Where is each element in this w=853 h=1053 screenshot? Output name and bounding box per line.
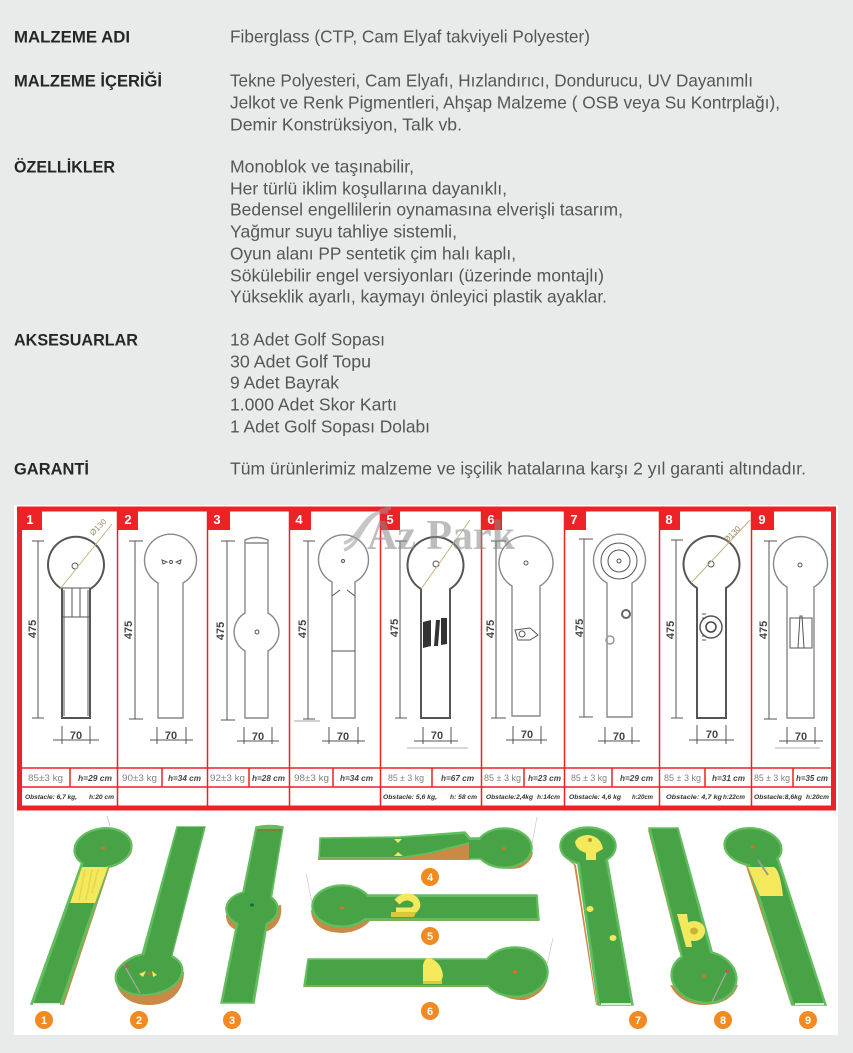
weights and heights: h=29 cm xyxy=(78,773,112,783)
course 2 xyxy=(112,827,205,1005)
weights and heights: h=28 cm xyxy=(252,773,285,783)
obstacle data: h: 58 cm xyxy=(450,794,477,801)
obstacle data: h:20cm xyxy=(806,794,829,801)
weights and heights: 90±3 kg xyxy=(122,773,157,784)
section: aksesuarlar: 30 Adet Golf Topu xyxy=(230,352,371,372)
drawing numbers: 2 xyxy=(124,512,132,527)
obstacle data: Obstacle: 6,7 kg, xyxy=(25,794,77,801)
course number badges: 9 xyxy=(805,1015,811,1027)
course number badges: 7 xyxy=(635,1015,641,1027)
obstacle data: h:20 cm xyxy=(89,794,114,801)
weights and heights: 85 ± 3 kg xyxy=(571,773,607,784)
weights and heights: h=29 cm xyxy=(620,773,653,783)
obstacle data: h:14cm xyxy=(537,794,560,801)
weights and heights: 92±3 kg xyxy=(210,773,245,784)
section: malzeme icerigi: Jelkot ve Renk Pigmentleri, Ahşap Malzeme ( OSB veya Su Kontrplağı), xyxy=(230,93,780,113)
course 4 xyxy=(318,817,537,869)
course number badges: 8 xyxy=(720,1015,726,1027)
section: ozellikler: Yükseklik ayarlı, kaymayı önleyici plastik ayaklar. xyxy=(230,287,607,307)
drawing numbers: 5 xyxy=(386,512,394,527)
course 3 xyxy=(221,826,283,1003)
course outlines xyxy=(32,517,827,748)
course 7 xyxy=(560,827,633,1005)
drawing numbers: 3 xyxy=(213,512,221,527)
drawing numbers: 7 xyxy=(570,512,578,527)
weights and heights: 85 ± 3 kg xyxy=(388,773,424,784)
drawing 8 xyxy=(684,520,750,718)
dimension lines xyxy=(32,539,777,720)
drawing numbers: 9 xyxy=(758,512,766,527)
section: malzeme icerigi: MALZEME İÇERİĞİ xyxy=(14,72,162,91)
section: malzeme icerigi xyxy=(14,71,780,135)
drawing 8: Ø130 xyxy=(722,524,743,544)
section: aksesuarlar: AKSESUARLAR xyxy=(14,332,138,350)
section: ozellikler: Oyun alanı PP sentetik çim halı kaplı, xyxy=(230,244,516,264)
weights and heights: 85 ± 3 kg xyxy=(484,773,521,784)
dimension labels: 475 xyxy=(758,621,770,639)
section: garanti: GARANTİ xyxy=(14,461,89,479)
section: ozellikler: Monoblok ve taşınabilir, xyxy=(230,157,414,177)
course 6 xyxy=(304,938,553,1000)
drawing 7 xyxy=(594,534,646,717)
drawing 5 xyxy=(407,520,470,748)
section: aksesuarlar: 18 Adet Golf Sopası xyxy=(230,330,385,350)
section: garanti: Tüm ürünlerimiz malzeme ve işçilik hatalarına karşı 2 yıl garanti altındadır. xyxy=(230,459,806,479)
section: aksesuarlar: 1 Adet Golf Sopası Dolabı xyxy=(230,417,430,437)
drawing numbers: 1 xyxy=(26,512,34,527)
drawing numbers: 6 xyxy=(487,512,495,527)
dimension labels: 70 xyxy=(613,731,625,743)
dimension labels xyxy=(27,619,807,743)
section: malzeme adi: Fiberglass (CTP, Cam Elyaf takviyeli Polyester) xyxy=(230,27,590,47)
course number badges: 5 xyxy=(427,931,433,943)
drawing 2 xyxy=(144,534,196,718)
section: ozellikler: Sökülebilir engel versiyonları (üzerinde montajlı) xyxy=(230,266,604,286)
course number badges xyxy=(35,868,817,1029)
weights and heights: 85 ± 3 kg xyxy=(754,773,790,784)
weights and heights: h=31 cm xyxy=(712,773,745,783)
dimension labels: 70 xyxy=(337,731,349,743)
weights and heights: 85±3 kg xyxy=(28,773,63,784)
dimension labels: 475 xyxy=(574,619,586,637)
section: malzeme adi: MALZEME ADI xyxy=(14,29,130,47)
weights and heights: h=35 cm xyxy=(796,773,828,783)
panel: technical drawings xyxy=(14,505,838,1035)
drawing numbers xyxy=(26,512,766,527)
watermark: Az Park xyxy=(367,513,516,559)
weights and heights: h=67 cm xyxy=(441,773,474,783)
drawing numbers: 4 xyxy=(295,512,303,527)
course 8 xyxy=(648,828,741,1008)
course 9 xyxy=(722,824,826,1005)
weights and heights: 98±3 kg xyxy=(294,773,329,784)
drawing 6 xyxy=(499,536,553,716)
weights and heights: h=23 cm xyxy=(528,773,561,783)
dimension labels: 70 xyxy=(521,729,533,741)
section: ozellikler: Yağmur suyu tahliye sistemli, xyxy=(230,222,457,242)
course number badges: 1 xyxy=(41,1015,47,1027)
section: aksesuarlar xyxy=(14,330,430,437)
weights and heights: h=34 cm xyxy=(168,773,201,783)
course number badges: 4 xyxy=(427,872,434,884)
course 1 xyxy=(31,816,135,1005)
dimension labels: 475 xyxy=(665,621,677,639)
section: ozellikler: Bedensel engellilerin oynamasına elverişli tasarım, xyxy=(230,200,623,220)
dimension labels: 70 xyxy=(70,730,82,742)
drawing 4 xyxy=(294,535,369,721)
dimension labels: 70 xyxy=(795,731,807,743)
dimension labels: 475 xyxy=(27,620,39,638)
dimension labels: 475 xyxy=(297,620,309,638)
section: ozellikler: Her türlü iklim koşullarına dayanıklı, xyxy=(230,179,507,199)
obstacle data: Obstacle:2,4kg xyxy=(486,794,533,801)
drawing 9 xyxy=(773,537,827,748)
obstacle data: Obstacle: 4,7 kg xyxy=(666,794,722,801)
obstacle data xyxy=(25,794,829,801)
weights and heights: h=34 cm xyxy=(340,773,373,783)
dimension labels: 475 xyxy=(389,619,401,637)
course number badges: 2 xyxy=(136,1015,142,1027)
obstacle data: h:22cm xyxy=(723,794,745,801)
section: aksesuarlar: 9 Adet Bayrak xyxy=(230,373,339,393)
weights and heights xyxy=(28,773,828,784)
course 5 xyxy=(306,873,539,933)
obstacle data: Obstacle: 4,6 kg xyxy=(569,794,621,801)
section: malzeme icerigi: Tekne Polyesteri, Cam Elyafı, Hızlandırıcı, Dondurucu, UV Dayanımlı xyxy=(230,71,753,91)
dimension labels: 70 xyxy=(165,730,177,742)
course number badges: 3 xyxy=(229,1015,235,1027)
drawing 1 xyxy=(48,517,112,718)
dimension labels: 70 xyxy=(252,731,264,743)
drawing numbers: 8 xyxy=(665,512,673,527)
dimension labels: 70 xyxy=(431,730,443,742)
dimension labels: 475 xyxy=(215,622,227,640)
section: malzeme adi xyxy=(14,27,590,47)
obstacle data: Obstacle: 5,6 kg, xyxy=(383,794,437,801)
course number badges: 6 xyxy=(427,1006,433,1018)
obstacle data: Obstacle:8,6kg xyxy=(754,794,802,801)
dimension labels: 70 xyxy=(706,729,718,741)
dimension labels: 475 xyxy=(485,620,497,638)
drawing 1: Ø130 xyxy=(88,517,109,537)
section: ozellikler: ÖZELLİKLER xyxy=(14,158,115,177)
section: aksesuarlar: 1.000 Adet Skor Kartı xyxy=(230,395,397,415)
panel: 3d course renders xyxy=(31,816,826,1008)
dimension labels: 475 xyxy=(123,621,135,639)
obstacle data: h:20cm xyxy=(632,794,653,801)
weights and heights: 85 ± 3 kg xyxy=(664,773,701,784)
section: ozellikler xyxy=(14,157,623,307)
drawing 3 xyxy=(234,538,279,718)
section: malzeme icerigi: Demir Konstrüksiyon, Talk vb. xyxy=(230,115,462,135)
